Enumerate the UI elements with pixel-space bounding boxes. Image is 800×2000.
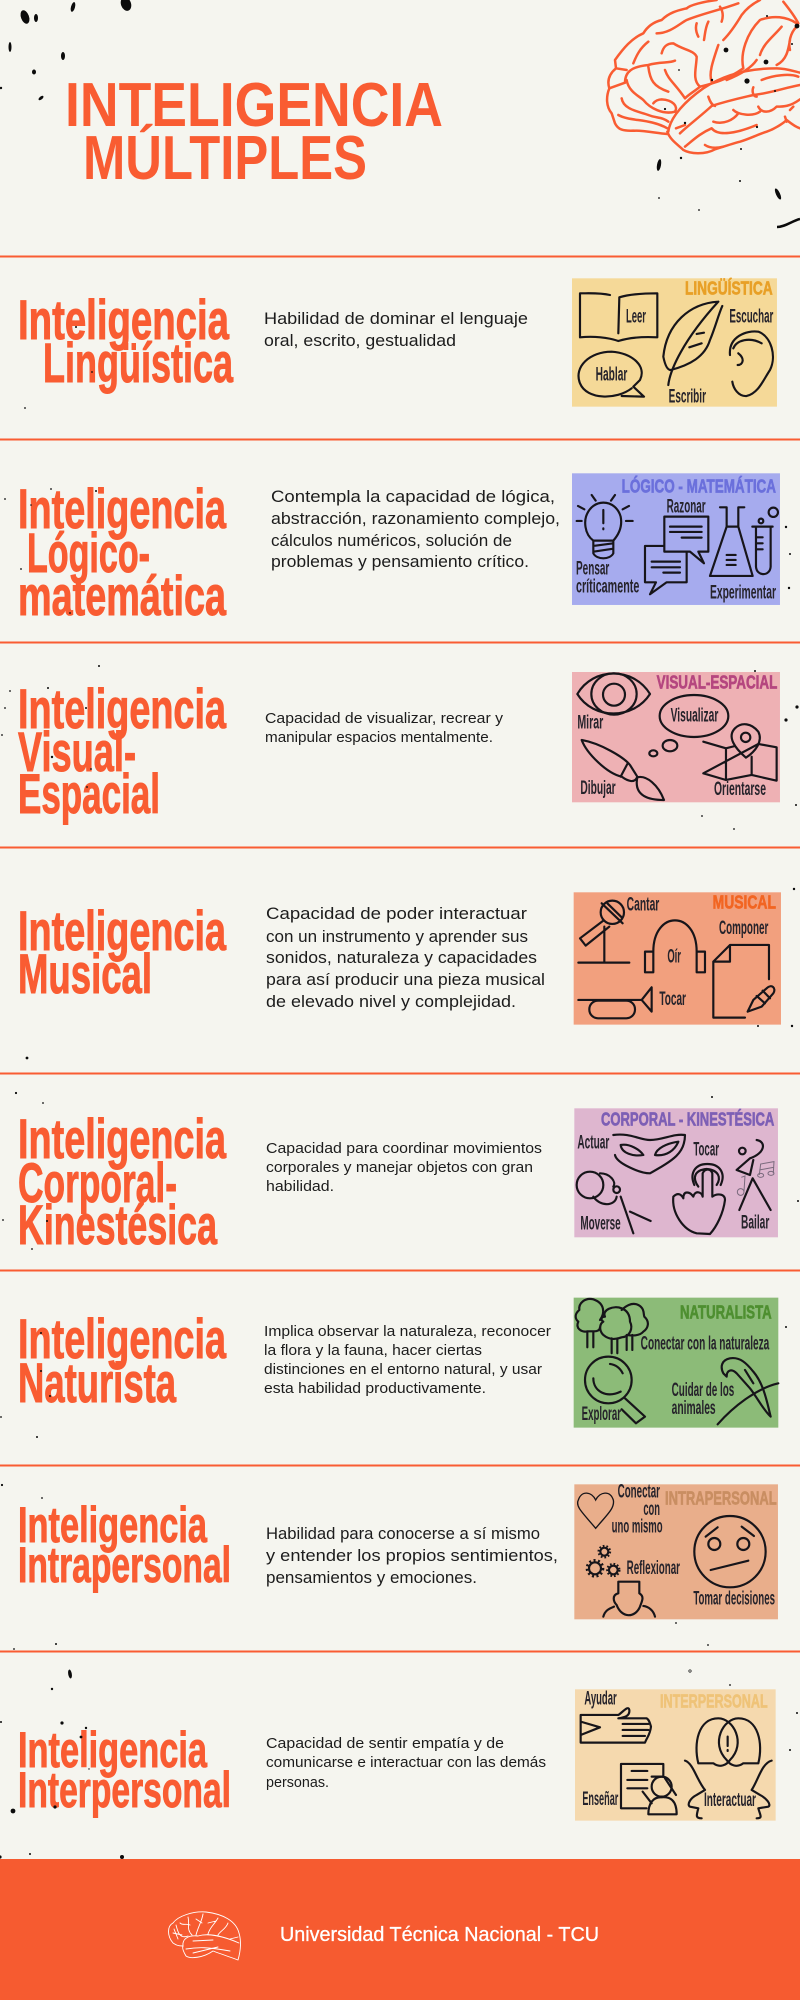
icon card: musical: Oír <box>667 947 681 968</box>
text: visual-espacial description <box>265 710 504 746</box>
text: intrapersonal description: pensamientos y emociones. <box>266 1568 477 1587</box>
icon card: lógico-matemática <box>572 473 780 605</box>
text: interpersonal description: comunicarse e interactuar con las demás <box>266 1754 546 1771</box>
panel: inteligencia musical <box>18 891 781 1025</box>
icon card: musical: Cantar <box>627 895 660 916</box>
text: lógico-matemática description: problemas y pensamiento crítico. <box>271 552 529 571</box>
heading: visual-espacial: Inteligencia <box>18 677 227 740</box>
panel: inteligencia interpersonal <box>18 1688 776 1821</box>
icon card: intrapersonal: Reflexionar <box>627 1558 680 1579</box>
icon card: visual-espacial: Visualizar <box>671 706 719 727</box>
icon card: lingüística <box>572 277 777 407</box>
text: intrapersonal description: Habilidad para conocerse a sí mismo <box>266 1524 540 1543</box>
icon card: corporal-kinestésica: Bailar <box>741 1212 770 1233</box>
icon card: naturista: animales <box>672 1398 716 1419</box>
heading: intrapersonal: Inteligencia <box>18 1497 208 1553</box>
heading: lógico-matemática: Inteligencia <box>18 477 227 540</box>
panel: inteligencia naturista <box>18 1298 778 1428</box>
title: INTELIGENCIA <box>65 71 443 140</box>
text: lógico-matemática description: abstracción, razonamiento complejo, <box>271 509 560 528</box>
panel: inteligencia lingüística <box>18 277 777 407</box>
text: lingüística description: oral, escrito, gestualidad <box>264 331 456 350</box>
footer band <box>0 1859 800 2000</box>
text: naturista description: Implica observar la naturaleza, reconocer <box>264 1323 551 1340</box>
text: visual-espacial description: Capacidad de visualizar, recrear y <box>265 710 504 727</box>
heading: naturista: Inteligencia <box>18 1307 227 1370</box>
text: naturista description <box>264 1323 551 1397</box>
heading: lingüística: Inteligencia <box>18 288 230 351</box>
title <box>65 71 443 193</box>
text: corporal-kinestésica description <box>266 1140 542 1195</box>
icon card: naturista <box>574 1298 778 1428</box>
icon card: corporal-kinestésica: Tocar <box>693 1140 719 1161</box>
text: musical description: sonidos, naturaleza y capacidades <box>266 948 537 967</box>
heading: corporal-kinestésica: Corporal- <box>18 1151 177 1214</box>
icon card: intrapersonal <box>574 1481 778 1619</box>
icon card: corporal-kinestésica: Actuar <box>577 1132 610 1153</box>
heading: intrapersonal: Intrapersonal <box>18 1537 231 1593</box>
panel: inteligencia visual-espacial <box>18 671 780 825</box>
text: naturista description: esta habilidad productivamente. <box>264 1380 486 1397</box>
heading: lingüística <box>18 288 234 394</box>
heading: visual-espacial: Espacial <box>18 762 160 825</box>
icon card: intrapersonal: uno mismo <box>612 1516 663 1537</box>
title: MÚLTIPLES <box>83 124 367 193</box>
text: musical description: de elevado nivel y complejidad. <box>266 992 516 1011</box>
text: interpersonal description <box>266 1735 546 1791</box>
text: musical description: Capacidad de poder interactuar <box>266 904 527 923</box>
icon card: visual-espacial: Dibujar <box>580 778 616 799</box>
icon card: lógico-matemática: Pensar <box>576 558 610 579</box>
heading: interpersonal <box>18 1722 231 1818</box>
icon card: lingüística: Leer <box>626 307 646 328</box>
icon card: musical: MUSICAL <box>713 891 776 912</box>
heading: corporal-kinestésica: Inteligencia <box>18 1107 227 1170</box>
heading: interpersonal: Inteligencia <box>18 1722 208 1778</box>
text: lingüística description <box>264 309 528 350</box>
panel: inteligencia intrapersonal <box>18 1481 778 1619</box>
heading: lógico-matemática: Lógico- <box>27 521 150 584</box>
heading: musical: Musical <box>18 942 152 1005</box>
icon card: naturista: Explorar <box>582 1404 621 1425</box>
panel: inteligencia lógico-matemática <box>18 473 780 627</box>
icon card: interpersonal: Enseñar <box>582 1789 619 1810</box>
text: corporal-kinestésica description: Capacidad para coordinar movimientos <box>266 1140 542 1157</box>
text: musical description: para así producir una pieza musical <box>266 970 545 989</box>
icon card: intrapersonal: con <box>643 1499 660 1520</box>
heading: interpersonal: Interpersonal <box>18 1762 231 1818</box>
text: lingüística description: Habilidad de dominar el lenguaje <box>264 309 528 328</box>
footer text: Universidad Técnica Nacional - TCU <box>280 1924 599 1946</box>
text: intrapersonal description <box>266 1524 558 1587</box>
text: musical description: con un instrumento y aprender sus <box>266 927 528 946</box>
icon: footer brain <box>168 1912 241 1960</box>
icon card: naturista: Cuidar de los <box>672 1380 734 1401</box>
icon card: lingüística: Hablar <box>596 365 628 386</box>
icon card: lingüística: Escribir <box>669 386 706 407</box>
text: naturista description: distinciones en el entorno natural, y usar <box>264 1361 542 1378</box>
icon card: visual-espacial: Mirar <box>577 712 604 733</box>
heading: musical: Inteligencia <box>18 899 227 962</box>
text: lógico-matemática description: cálculos numéricos, solución de <box>271 531 512 550</box>
text: interpersonal description: personas. <box>266 1774 329 1791</box>
text: corporal-kinestésica description: habilidad. <box>266 1178 334 1195</box>
icon card: interpersonal: Interactuar <box>704 1790 756 1811</box>
icon card: interpersonal: Ayudar <box>584 1688 617 1709</box>
text: musical description <box>266 904 545 1011</box>
heading: corporal-kinestésica <box>18 1107 227 1256</box>
icon card: lógico-matemática: críticamente <box>576 576 639 597</box>
text: lógico-matemática description <box>271 487 560 571</box>
icon card: lógico-matemática: Razonar <box>667 496 706 517</box>
heading: visual-espacial <box>18 677 227 825</box>
heading: naturista <box>18 1307 227 1414</box>
icon card: interpersonal <box>575 1688 776 1821</box>
icon card: musical: Tocar <box>659 989 686 1010</box>
heading: musical <box>18 899 227 1005</box>
heading: corporal-kinestésica: Kinestésica <box>18 1193 218 1256</box>
text: intrapersonal description: y entender los propios sentimientos, <box>266 1546 558 1565</box>
text: lógico-matemática description: Contempla la capacidad de lógica, <box>271 487 555 506</box>
heading: lógico-matemática: matemática <box>18 564 227 627</box>
panel: inteligencia corporal-kinestésica <box>18 1107 778 1256</box>
icon card: corporal-kinestésica <box>574 1108 778 1237</box>
brain illustration <box>607 0 800 153</box>
heading: visual-espacial: Visual- <box>18 720 136 783</box>
heading: naturista: Naturista <box>18 1351 177 1414</box>
text: naturista description: la flora y la fauna, hacer ciertas <box>264 1342 482 1359</box>
icon card: intrapersonal: Conectar <box>618 1481 660 1502</box>
heading: lógico-matemática <box>18 477 227 627</box>
heading: lingüística: Lingüística <box>43 331 234 394</box>
icon card: corporal-kinestésica: Moverse <box>580 1213 621 1234</box>
heading: intrapersonal <box>18 1497 231 1593</box>
text: visual-espacial description: manipular espacios mentalmente. <box>265 729 493 746</box>
icon card: visual-espacial <box>572 671 780 802</box>
text: corporal-kinestésica description: corporales y manejar objetos con gran <box>266 1159 533 1176</box>
icon card: musical <box>574 891 781 1025</box>
text: interpersonal description: Capacidad de sentir empatía y de <box>266 1735 504 1752</box>
